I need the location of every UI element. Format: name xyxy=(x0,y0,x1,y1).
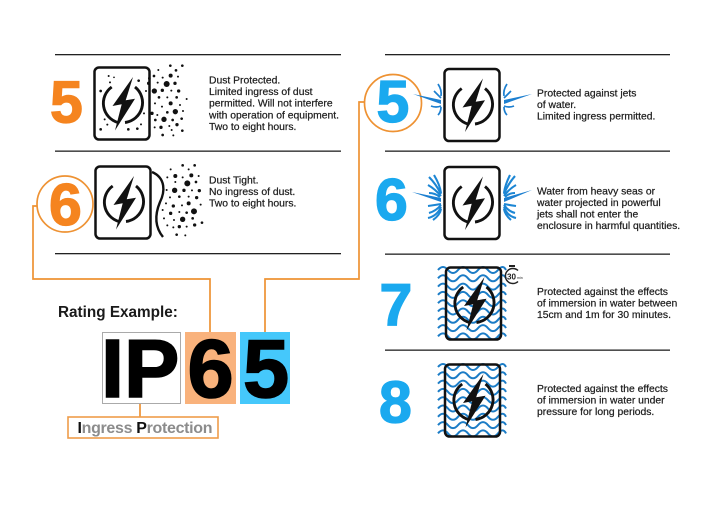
ingress protection label: Ingress Protection xyxy=(78,420,212,437)
water rating 8 number: 8 xyxy=(379,370,412,436)
icon: 30 minute timer: min xyxy=(517,276,523,280)
icon: pressure immersion enclosure xyxy=(438,364,506,436)
water rating 8 description: pressure for long periods. xyxy=(537,407,654,418)
dust rating 6 description: Two to eight hours. xyxy=(209,198,296,210)
orange connector: dust 6 to IP rating xyxy=(33,206,210,332)
icon: enclosure with water jets xyxy=(413,69,532,141)
rating code: second digit 5: 5 xyxy=(243,322,289,415)
water rating 8 description: Protected against the effects xyxy=(537,384,668,395)
dust rating 5 description: Dust Protected. xyxy=(209,76,280,86)
icon: enclosure with powerful jets xyxy=(412,167,532,239)
dust rating 5 description: with operation of equipment. xyxy=(208,110,339,122)
water rating 6 description: jets shall not enter the xyxy=(536,210,638,220)
icon: dust protected enclosure xyxy=(94,64,188,140)
dust rating 5 description: Two to eight hours. xyxy=(209,122,296,133)
water rating 6 description: Water from heavy seas or xyxy=(537,186,656,198)
right panel divider lines xyxy=(385,54,670,351)
dust rating 5 description: permitted. Will not interfere xyxy=(209,98,333,110)
dust rating 6 description: Dust Tight. xyxy=(209,176,258,186)
icon: 30 minute timer xyxy=(505,265,523,284)
icon: 30 minute timer: 30 xyxy=(507,272,516,282)
water rating 5 description: Protected against jets xyxy=(537,88,636,100)
dust rating 6 description: No ingress of dust. xyxy=(209,187,295,198)
water rating 5 circled number: 5 xyxy=(376,69,409,135)
water rating 7 description: of immersion in water between xyxy=(537,298,678,310)
water rating 6 description: enclosure in harmful quantities. xyxy=(537,221,680,232)
water rating 7 number: 7 xyxy=(380,272,412,338)
water rating 7 description: 15cm and 1m for 30 minutes. xyxy=(537,310,671,321)
water rating 6 number: 6 xyxy=(375,167,408,233)
water rating 8 description: of immersion in water under xyxy=(537,396,665,406)
dust rating 6 circled number xyxy=(37,172,93,238)
water rating 7 description: Protected against the effects xyxy=(537,287,668,298)
icon: dust tight enclosure xyxy=(96,164,203,238)
dust rating 5 description: Limited ingress of dust xyxy=(209,87,313,98)
water rating 6 description: water projected in powerful xyxy=(536,198,661,209)
orange connector: water 5 to IP rating xyxy=(265,102,364,332)
icon: immersion enclosure with timer xyxy=(438,265,523,340)
connector: IP to label xyxy=(139,404,141,417)
dust rating 5 number: 5 xyxy=(50,70,83,136)
left panel divider lines xyxy=(55,54,341,254)
rating example heading: Rating Example: xyxy=(58,304,178,321)
water rating 5 circled number xyxy=(364,69,422,135)
rating code: first digit 6: 6 xyxy=(188,322,234,415)
water rating 5 description: of water. xyxy=(537,100,576,111)
dust rating 6 circled number: 6 xyxy=(49,172,82,238)
water rating 5 description: Limited ingress permitted. xyxy=(537,112,655,122)
rating code: IP box: IP xyxy=(101,322,179,415)
